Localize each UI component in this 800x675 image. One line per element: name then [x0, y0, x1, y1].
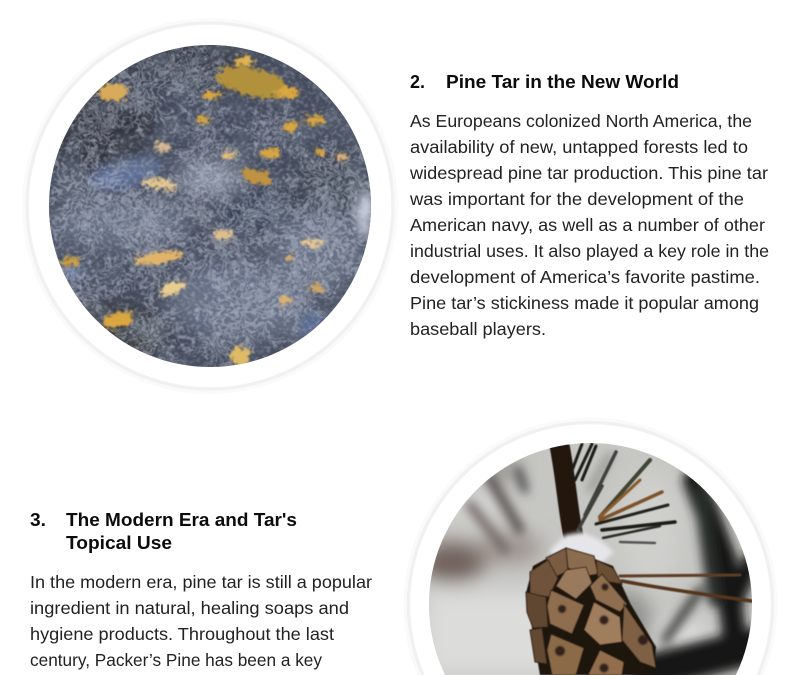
heading: section 3: Topical Use [66, 532, 172, 553]
text block: section 2 body: development of America’s favorite pastime. [410, 267, 760, 287]
heading: section 3 [30, 509, 297, 553]
frosted treetops [49, 45, 370, 367]
text block: section 2 body: industrial uses. It also played a key role in the [410, 241, 769, 261]
heading: section 2: Pine Tar in the New World [446, 71, 679, 92]
cone [526, 548, 656, 675]
text block: section 2 body: Pine tar’s stickiness made it popular among [410, 293, 759, 313]
branch and needles [560, 444, 752, 601]
text block: section 2 body: baseball players. [410, 319, 546, 339]
photo: snowy pine forest from above [49, 45, 371, 367]
snow clearings [54, 151, 374, 339]
text block: section 3 body: century, Packer’s Pine has been a key [30, 650, 322, 670]
golden sunlit treetops [59, 56, 347, 365]
heading: section 3: 3. [30, 509, 46, 530]
text block: section 3 body [30, 572, 372, 670]
photo: pine cone on snowy branch [418, 443, 760, 675]
text block: section 2 body: As Europeans colonized North America, the [410, 111, 752, 131]
text block: section 2 body: American navy, as well as a number of other [410, 215, 765, 235]
text block: section 3 body: hygiene products. Throughout the last [30, 624, 334, 644]
heading: section 2: 2. [410, 71, 425, 92]
heading: section 3: The Modern Era and Tar's [66, 509, 297, 530]
blurred background [418, 454, 710, 675]
snow on the cone stem [549, 532, 614, 565]
text block: section 2 body: was important for the development of the [409, 189, 744, 209]
text block: section 2 body [409, 111, 769, 339]
text block: section 3 body: ingredient in natural, healing soaps and [30, 598, 349, 618]
text block: section 2 body: availability of new, untapped forests led to [410, 137, 748, 157]
ring: second photo frame [405, 419, 776, 675]
text block: section 3 body: In the modern era, pine tar is still a popular [30, 572, 372, 592]
text block: section 2 body: widespread pine tar production. This pine tar [409, 163, 768, 183]
ring: first photo frame [24, 20, 396, 392]
